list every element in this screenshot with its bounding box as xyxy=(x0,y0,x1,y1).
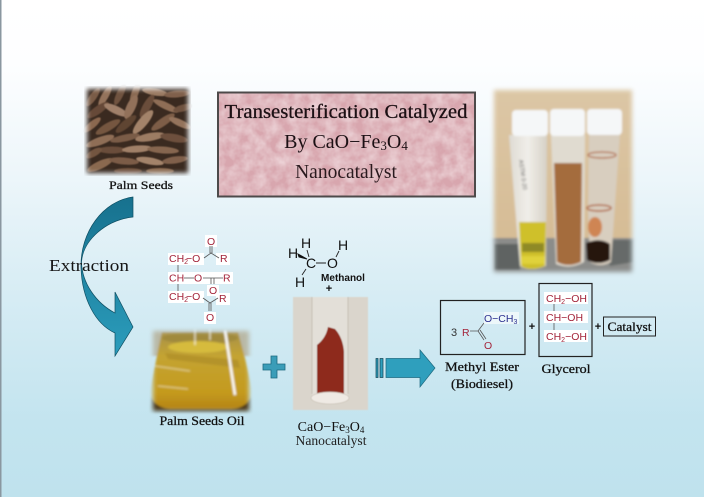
label: extraction: Extraction xyxy=(49,256,129,275)
title box: By CaO−Fe xyxy=(284,131,380,153)
box: catalyst xyxy=(604,317,656,336)
label: methyl ester biodiesel xyxy=(445,359,520,391)
title box: Nanocatalyst xyxy=(295,162,397,183)
photo: three vials xyxy=(488,84,638,278)
vial 1 xyxy=(509,135,547,269)
title box: 4 xyxy=(401,138,408,153)
label: methyl ester biodiesel: Methyl Ester xyxy=(445,359,520,374)
photo: nanocatalyst vial xyxy=(293,297,368,410)
methanol structure: H xyxy=(288,245,298,261)
triglyceride structure: O xyxy=(207,236,215,248)
label: CaO-Fe3O4 nanocatalyst: Nanocatalyst xyxy=(296,433,367,448)
photo: three vials: ASTM 0-20 xyxy=(517,159,527,191)
triglyceride structure: −O xyxy=(186,253,200,265)
arrow: extraction curve xyxy=(81,197,133,356)
methanol structure: + xyxy=(326,283,332,295)
box: methyl ester: O−CH xyxy=(484,313,513,325)
title box: O xyxy=(387,131,401,153)
label: CaO-Fe3O4 nanocatalyst: CaO−Fe xyxy=(298,420,345,435)
triglyceride structure: O xyxy=(194,272,202,284)
triglyceride structure: O xyxy=(206,312,214,324)
box: glycerol structure: 2 xyxy=(561,299,565,306)
box: catalyst: Catalyst xyxy=(608,320,652,334)
box: methyl ester xyxy=(440,300,525,354)
box: glycerol structure: CH xyxy=(546,331,561,343)
box: glycerol structure: −OH xyxy=(565,293,587,305)
triglyceride structure: 2 xyxy=(184,259,188,266)
label: CaO-Fe3O4 nanocatalyst: O xyxy=(350,420,360,435)
box: methyl ester: 3 xyxy=(451,327,457,339)
triglyceride structure: 2 xyxy=(184,297,188,304)
box: glycerol structure: −OH xyxy=(565,331,587,343)
title box: 3 xyxy=(380,138,387,153)
label: palm seeds: Palm Seeds xyxy=(109,178,173,192)
triglyceride structure: CH xyxy=(169,291,184,303)
title box: Transesterification Catalyzed xyxy=(224,101,468,123)
methanol structure: Methanol xyxy=(321,273,365,284)
methanol structure xyxy=(288,235,365,295)
vial 3 xyxy=(588,133,620,265)
label: CaO-Fe3O4 nanocatalyst xyxy=(296,420,367,448)
photo: palm seeds xyxy=(81,81,194,176)
triglyceride structure: R xyxy=(220,253,228,265)
triglyceride structure: −O xyxy=(186,291,200,303)
box: methyl ester: R xyxy=(462,327,470,339)
methanol structure: H xyxy=(295,274,305,290)
box: glycerol structure: CH xyxy=(546,293,561,305)
box: methyl ester: O xyxy=(484,340,492,352)
label: CaO-Fe3O4 nanocatalyst: 4 xyxy=(360,425,365,435)
methanol structure: C xyxy=(306,255,316,271)
triglyceride structure: CH xyxy=(169,272,184,284)
box: glycerol structure xyxy=(539,284,592,356)
box: glycerol structure: CH−OH xyxy=(546,312,583,324)
icon: plus sign xyxy=(263,356,285,378)
plus: glycerol and catalyst: + xyxy=(595,321,601,333)
triglyceride structure: O xyxy=(209,285,217,297)
methanol structure: H xyxy=(301,235,311,251)
label: methyl ester biodiesel: (Biodiesel) xyxy=(451,376,513,391)
box: methyl ester: 3 xyxy=(513,319,517,326)
triglyceride structure xyxy=(168,235,233,324)
photo: palm seeds oil flask xyxy=(148,326,254,414)
triglyceride structure: R xyxy=(223,272,231,284)
methanol structure: H xyxy=(338,237,348,253)
arrow: reaction xyxy=(376,350,435,387)
box: glycerol structure: 2 xyxy=(561,337,565,344)
label: palm seeds oil: Palm Seeds Oil xyxy=(160,413,245,428)
plus: methyl ester and glycerol: + xyxy=(529,321,535,333)
vial 2 xyxy=(551,135,585,267)
methanol structure: O xyxy=(327,255,338,271)
title box xyxy=(218,92,475,196)
triglyceride structure: R xyxy=(219,293,227,305)
label: CaO-Fe3O4 nanocatalyst: 3 xyxy=(345,425,350,435)
label: glycerol: Glycerol xyxy=(542,361,591,376)
triglyceride structure: CH xyxy=(169,253,184,265)
